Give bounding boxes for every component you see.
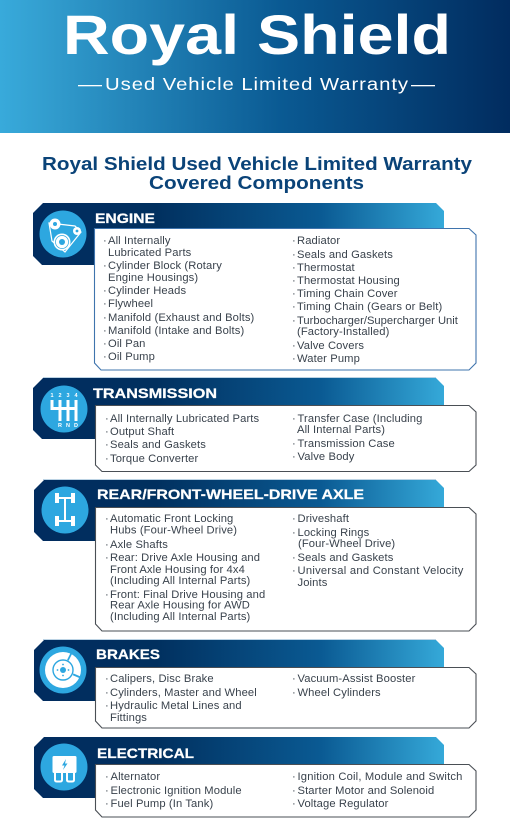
- engine list left: Manifold (Exhaust and Bolts): [108, 312, 255, 324]
- electrical list right: Ignition Coil, Module and Switch: [298, 771, 462, 783]
- engine list right: ·: [292, 315, 296, 327]
- engine list left: ·: [103, 285, 107, 297]
- section title: brakes: BRAKES: [96, 646, 160, 662]
- axle list left: ·: [105, 589, 109, 601]
- icon: gear shift pattern: 3: [66, 393, 70, 399]
- engine list right: ·: [292, 353, 296, 365]
- icon: gear shift pattern: 2: [58, 393, 62, 399]
- axle list left: Front: Final Drive Housing and: [110, 589, 265, 601]
- icon: gear shift pattern: N: [66, 423, 70, 429]
- section title: axle: REAR/FRONT-WHEEL-DRIVE AXLE: [97, 486, 364, 502]
- engine list left: Engine Housings): [108, 272, 198, 284]
- transmission list right: Transmission Case: [298, 438, 395, 450]
- transmission list right: ·: [292, 413, 296, 425]
- axle list left: Hubs (Four-Wheel Drive): [110, 524, 237, 536]
- transmission list right: ·: [292, 451, 296, 463]
- brakes list left: Hydraulic Metal Lines and: [110, 700, 242, 712]
- panel: engine: [33, 203, 476, 370]
- brakes list left: Cylinders, Master and Wheel: [110, 687, 257, 699]
- axle list right: ·: [292, 513, 296, 525]
- engine list right: Thermostat: [297, 262, 356, 274]
- electrical list left: ·: [105, 785, 109, 797]
- panel: axle: [34, 480, 476, 631]
- section title: electrical: ELECTRICAL: [97, 745, 194, 761]
- engine list right: ·: [292, 340, 296, 352]
- icon: gear shift pattern: R: [58, 423, 62, 429]
- brakes list right: Vacuum-Assist Booster: [298, 673, 416, 685]
- brakes list right: ·: [292, 673, 296, 685]
- icon: gear shift pattern: D: [74, 423, 78, 429]
- engine list right: ·: [292, 249, 296, 261]
- transmission list left: ·: [105, 453, 109, 465]
- engine list left: ·: [103, 325, 107, 337]
- axle list left: ·: [105, 552, 109, 564]
- icon: axle chassis: [42, 486, 88, 534]
- electrical list left: ·: [105, 771, 109, 783]
- axle list right: Driveshaft: [298, 513, 350, 525]
- engine list right: Radiator: [297, 235, 340, 247]
- transmission list left: ·: [105, 413, 109, 425]
- transmission list right: All Internal Parts): [297, 424, 385, 436]
- icon: gear shift pattern: [40, 386, 88, 432]
- brakes list left: Fittings: [110, 712, 147, 724]
- engine list left: ·: [103, 351, 107, 363]
- axle list right: Locking Rings: [298, 527, 370, 539]
- axle list left: Front Axle Housing for 4x4: [110, 564, 245, 576]
- brakes list left: ·: [105, 687, 109, 699]
- axle list left: Rear: Drive Axle Housing and: [110, 552, 260, 564]
- engine list right: ·: [292, 275, 296, 287]
- icon: engine belt and pulleys: [40, 210, 86, 258]
- engine list left: Oil Pan: [108, 338, 146, 350]
- axle list box: [96, 508, 476, 631]
- engine list left: Flywheel: [108, 298, 153, 310]
- brakes list right: [292, 673, 416, 699]
- engine list right: Timing Chain Cover: [297, 288, 398, 300]
- transmission list left: Torque Converter: [110, 453, 199, 465]
- axle list left: (Including All Internal Parts): [110, 575, 251, 587]
- engine list right: Turbocharger/Supercharger Unit: [297, 315, 459, 327]
- icon: gear shift pattern: 4: [74, 393, 78, 399]
- transmission list right: [292, 413, 422, 463]
- transmission list right: Transfer Case (Including: [298, 413, 422, 425]
- axle list left: ·: [105, 513, 109, 525]
- brakes list left: Calipers, Disc Brake: [110, 673, 214, 685]
- brakes list left: ·: [105, 700, 109, 712]
- icon: brake disc and caliper: [40, 646, 86, 694]
- panel: brakes: [34, 640, 476, 728]
- header banner: [0, 0, 510, 133]
- electrical list left: Electronic Ignition Module: [110, 785, 242, 797]
- engine list right: Valve Covers: [297, 340, 364, 352]
- electrical list right: [292, 771, 462, 810]
- electrical list left: Alternator: [110, 771, 160, 783]
- electrical list right: Starter Motor and Solenoid: [298, 785, 434, 797]
- engine list right: (Factory-Installed): [297, 326, 390, 338]
- axle list right: ·: [292, 552, 296, 564]
- engine list left: Cylinder Block (Rotary: [108, 260, 222, 272]
- transmission list left: ·: [105, 439, 109, 451]
- engine list left: Oil Pump: [108, 351, 155, 363]
- engine list right: Water Pump: [297, 353, 360, 365]
- engine list left: Lubricated Parts: [108, 247, 192, 259]
- transmission list box: [96, 406, 476, 472]
- transmission list left: Output Shaft: [110, 426, 175, 438]
- axle list left: Automatic Front Locking: [110, 513, 233, 525]
- engine list left: All Internally: [108, 235, 171, 247]
- electrical list right: ·: [292, 771, 296, 783]
- transmission list right: ·: [292, 438, 296, 450]
- transmission list left: All Internally Lubricated Parts: [110, 413, 260, 425]
- section title: engine: ENGINE: [95, 210, 155, 226]
- engine list right: ·: [292, 288, 296, 300]
- axle list right: ·: [292, 527, 296, 539]
- transmission list left: ·: [105, 426, 109, 438]
- axle list right: [292, 513, 464, 589]
- engine list right: [292, 235, 459, 365]
- axle list right: (Four-Wheel Drive): [298, 538, 395, 550]
- axle list right: Seals and Gaskets: [298, 552, 394, 564]
- engine list box: [94, 228, 476, 370]
- electrical list right: ·: [292, 785, 296, 797]
- panel: transmission: [33, 378, 476, 472]
- engine list right: Timing Chain (Gears or Belt): [297, 301, 442, 313]
- electrical list right: Voltage Regulator: [298, 798, 389, 810]
- engine list right: ·: [292, 301, 296, 313]
- panel: electrical: [34, 737, 476, 817]
- page heading: Covered Components: [149, 172, 364, 193]
- electrical list left: Fuel Pump (In Tank): [110, 798, 213, 810]
- electrical list right: ·: [292, 798, 296, 810]
- engine list left: ·: [103, 260, 107, 272]
- brakes list right: Wheel Cylinders: [298, 687, 381, 699]
- engine list left: ·: [103, 235, 107, 247]
- engine list left: ·: [103, 298, 107, 310]
- axle list left: (Including All Internal Parts): [110, 611, 251, 623]
- subtitle with rules: Used Vehicle Limited Warranty: [105, 74, 409, 94]
- engine list left: ·: [103, 312, 107, 324]
- engine list left: ·: [103, 338, 107, 350]
- brand title: Royal Shield: [63, 3, 451, 66]
- transmission list left: [105, 413, 260, 465]
- transmission list left: Seals and Gaskets: [110, 439, 206, 451]
- icon: gear shift pattern: 1: [50, 393, 54, 399]
- axle list left: ·: [105, 539, 109, 551]
- axle list right: Joints: [298, 577, 328, 589]
- brakes list right: ·: [292, 687, 296, 699]
- engine list left: Cylinder Heads: [108, 285, 186, 297]
- engine list left: Manifold (Intake and Bolts): [108, 325, 244, 337]
- axle list right: Universal and Constant Velocity: [298, 565, 464, 577]
- brakes list left: [105, 673, 257, 724]
- axle list left: Rear Axle Housing for AWD: [110, 600, 250, 612]
- brakes list left: ·: [105, 673, 109, 685]
- engine list right: Thermostat Housing: [297, 275, 400, 287]
- engine list right: Seals and Gaskets: [297, 249, 393, 261]
- transmission list right: Valve Body: [298, 451, 355, 463]
- engine list right: ·: [292, 235, 296, 247]
- electrical list left: [105, 771, 242, 810]
- axle list left: [105, 513, 265, 623]
- page heading: [42, 153, 473, 193]
- electrical list box: [96, 764, 476, 817]
- brakes list box: [96, 668, 476, 728]
- axle list left: Axle Shafts: [110, 539, 168, 551]
- engine list right: ·: [292, 262, 296, 274]
- icon: blade fuse: [40, 744, 88, 790]
- axle list right: ·: [292, 565, 296, 577]
- section title: transmission: TRANSMISSION: [93, 385, 217, 401]
- engine list left: [103, 235, 255, 363]
- page heading: Royal Shield Used Vehicle Limited Warranty: [42, 153, 473, 174]
- electrical list left: ·: [105, 798, 109, 810]
